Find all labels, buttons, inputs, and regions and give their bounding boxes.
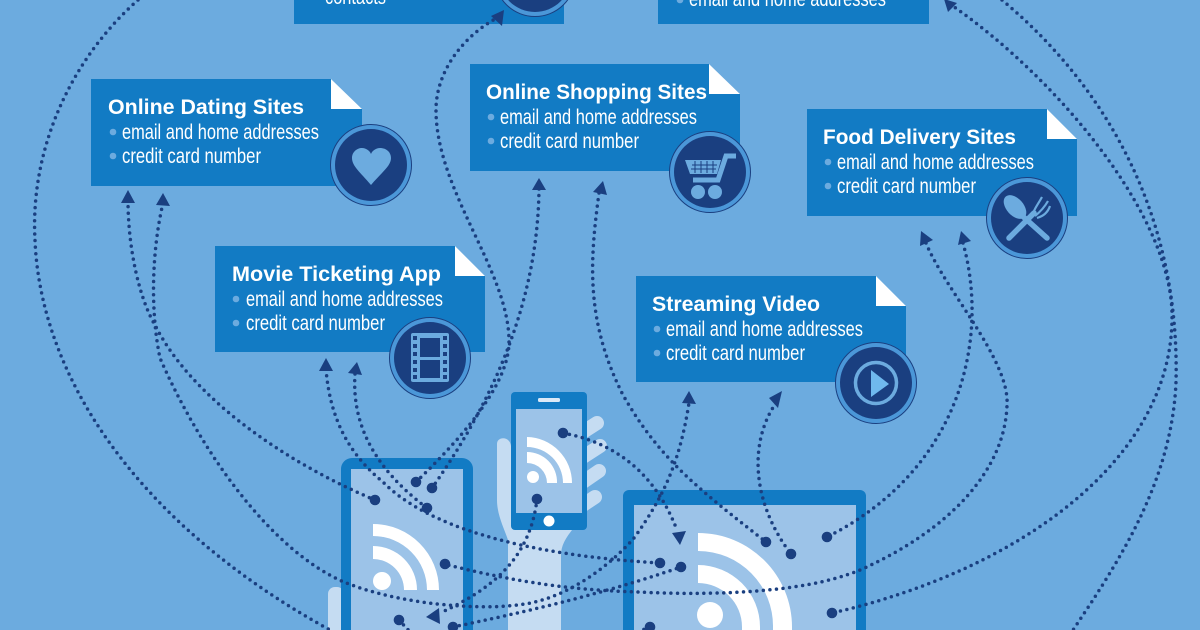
- panel: online dating sites: email and home addresses: [122, 121, 319, 144]
- panel: movie ticketing app: credit card number: [246, 312, 385, 335]
- icon: tablet held in hand: [328, 458, 473, 630]
- panel: online shopping sites: credit card number: [500, 130, 639, 153]
- panel: top right card (cropped): [658, 0, 929, 24]
- icon: heart: [330, 124, 412, 206]
- panel: online shopping sites: email and home addresses: [500, 106, 697, 129]
- panel: food delivery sites: credit card number: [837, 175, 976, 198]
- panel: movie ticketing app: email and home addresses: [246, 288, 443, 311]
- panel: top left card (cropped): [294, 0, 576, 24]
- icon: play button: [836, 342, 916, 424]
- panel: movie ticketing app: [215, 246, 485, 352]
- icon: hand holding phone: [497, 423, 600, 630]
- panel: streaming video: Streaming Video: [652, 293, 820, 316]
- panel: online dating sites: Online Dating Sites: [108, 96, 304, 119]
- icon: film strip: [390, 318, 470, 398]
- panel: online dating sites: [91, 79, 362, 186]
- panel: streaming video: [636, 276, 906, 382]
- panel: food delivery sites: Food Delivery Sites: [823, 126, 1016, 149]
- panel: streaming video: credit card number: [666, 342, 805, 365]
- icon: phone: [511, 392, 587, 530]
- icon: spoon and fork: [986, 178, 1068, 258]
- icon: shopping cart: [670, 132, 750, 212]
- panel: food delivery sites: [807, 109, 1077, 216]
- panel: online shopping sites: Online Shopping Sites: [486, 81, 707, 104]
- panel: online shopping sites: [470, 64, 740, 171]
- arrowheads: [121, 0, 971, 624]
- panel: food delivery sites: email and home addresses: [837, 151, 1034, 174]
- icon: large tablet: [623, 490, 866, 630]
- panel: online dating sites: credit card number: [122, 145, 261, 168]
- panel: movie ticketing app: Movie Ticketing App: [232, 263, 441, 286]
- data source nodes: [370, 428, 837, 630]
- panel: streaming video: email and home addresses: [666, 318, 863, 341]
